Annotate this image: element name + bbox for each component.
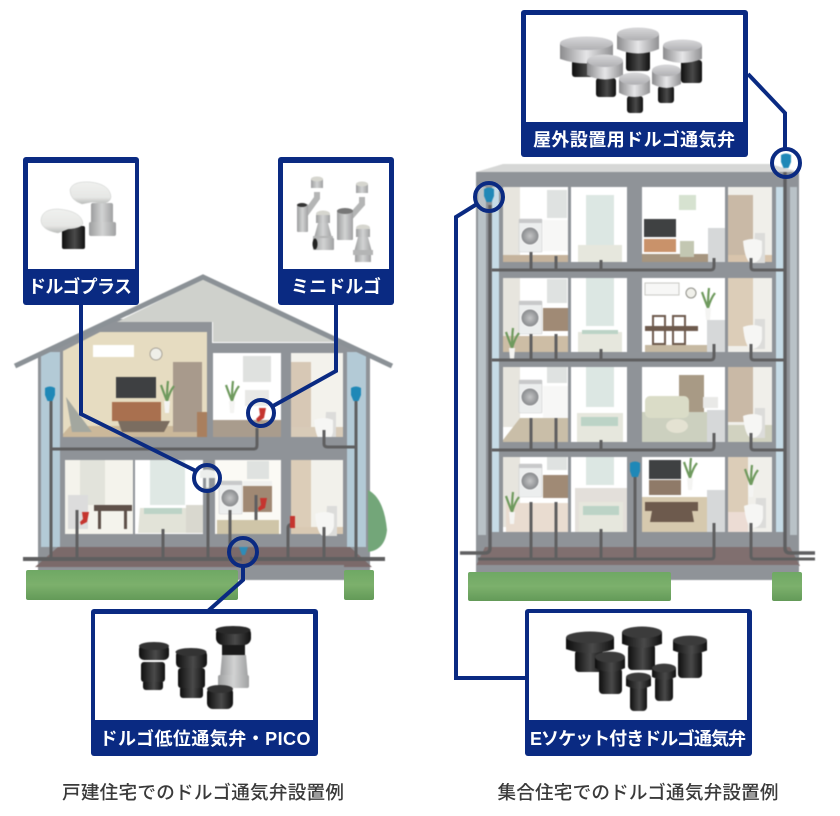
right light strip (790, 187, 797, 535)
icon: black socket vents (566, 627, 707, 711)
apartment body (476, 172, 799, 565)
floor 3 rooms (503, 367, 772, 442)
left shaft (492, 187, 499, 532)
heading: apartment: 集合住宅でのドルゴ通気弁設置例 (498, 782, 778, 803)
upper washroom (213, 353, 281, 437)
lower toilet room (291, 460, 343, 536)
crawl space (476, 547, 800, 566)
heading: detached house: 戸建住宅でのドルゴ通気弁設置例 (62, 782, 344, 803)
floor 1 rooms (503, 187, 772, 263)
roof (15, 277, 392, 366)
caption: ドルゴプラス (28, 276, 132, 297)
floor 4 rooms (503, 457, 772, 532)
callout: Eソケット付きドルゴ通気弁 (525, 609, 752, 756)
marker: e-socket (475, 183, 503, 211)
right shaft (347, 352, 366, 547)
caption: 屋外設置用ドルゴ通気弁 (533, 129, 735, 150)
riser vent (630, 462, 640, 477)
caption: ドルゴ低位通気弁・PICO (100, 728, 310, 749)
right shaft (776, 187, 784, 532)
connector: mini (273, 305, 336, 406)
left light strip (478, 187, 486, 535)
basement (476, 532, 800, 565)
floor 2 rooms (503, 278, 772, 360)
marker: mini (248, 400, 274, 426)
connector: plus (81, 305, 196, 471)
marker: plus (194, 465, 220, 491)
attic (117, 279, 335, 342)
callout: ドルゴプラス (23, 157, 139, 305)
lower washroom (215, 460, 281, 534)
floor slab and drain (62, 437, 345, 460)
roof top (476, 164, 799, 172)
icon: mini fittings (297, 176, 373, 262)
apartment hedge left (468, 572, 671, 601)
house building (15, 277, 392, 580)
upper toilet room (291, 353, 343, 442)
connector: pico (208, 566, 243, 611)
connector: e-socket (456, 204, 526, 678)
marker: outdoor (772, 149, 800, 177)
caption: ミニドルゴ (291, 276, 381, 297)
icon: plus valves (41, 182, 116, 249)
house pipes (23, 398, 385, 560)
apartment building (460, 154, 815, 580)
foundation (238, 565, 344, 580)
callout: 屋外設置用ドルゴ通気弁 (521, 10, 748, 157)
callout: ドルゴ低位通気弁・PICO (91, 609, 318, 756)
living room (63, 332, 207, 437)
house hedge right (344, 570, 374, 600)
left shaft (41, 352, 60, 547)
foundation (476, 565, 799, 580)
icon: chrome vents (560, 28, 702, 113)
apartment hedge right (772, 572, 802, 601)
icon: pico valves (139, 626, 251, 709)
connector: outdoor (748, 74, 785, 150)
apartment pipes (460, 172, 815, 559)
house hedge left (26, 570, 238, 600)
house vents (45, 386, 361, 555)
house walls (38, 319, 370, 580)
roof vent left (484, 188, 494, 202)
lower bath room (135, 460, 203, 534)
lower kitchen room (65, 460, 133, 534)
callout: ミニドルゴ (278, 157, 394, 305)
marker: pico (229, 538, 257, 566)
crawl space (35, 547, 372, 567)
roof vent right (781, 154, 791, 168)
tree (368, 490, 387, 552)
caption: Eソケット付きドルゴ通気弁 (530, 728, 746, 749)
